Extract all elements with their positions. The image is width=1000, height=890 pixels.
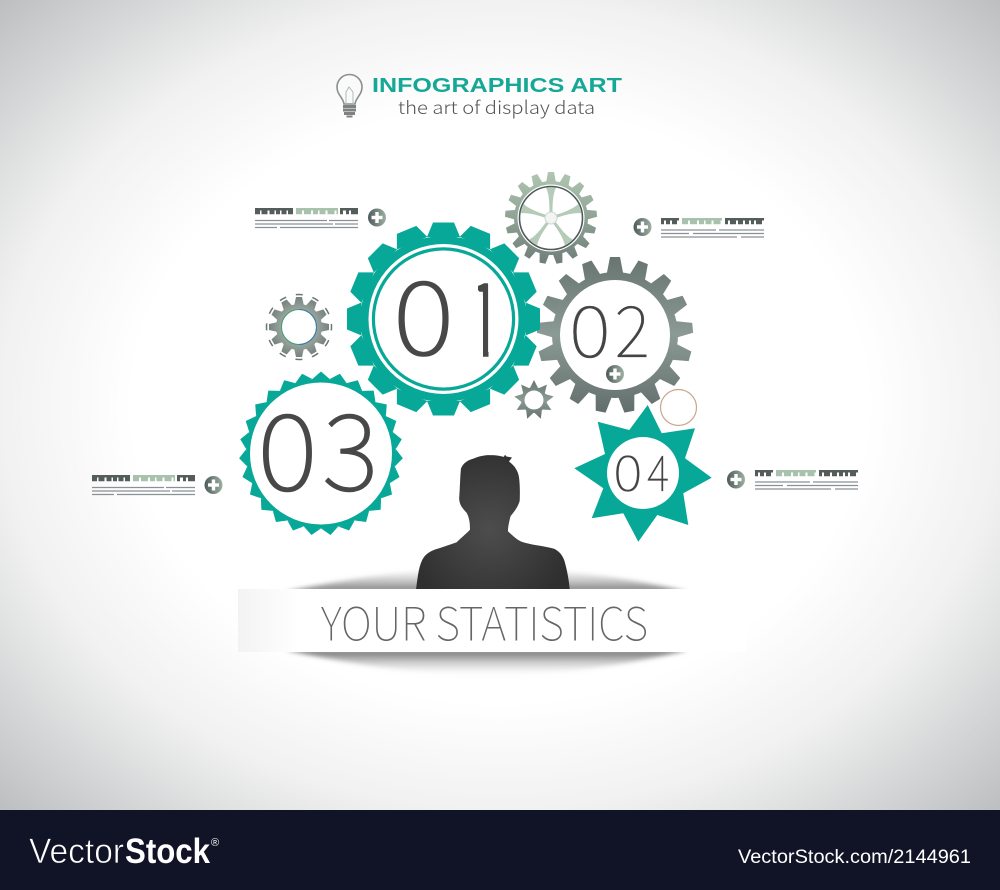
banner shadows bbox=[285, 568, 688, 675]
number 03: 3 bbox=[322, 368, 378, 521]
number 03: 0 bbox=[257, 368, 318, 520]
icon: plus bbox=[606, 365, 624, 383]
footer logo: ® bbox=[211, 837, 219, 849]
icon: light bulb bbox=[337, 74, 362, 116]
gear 02 bbox=[536, 257, 694, 413]
number 01 bbox=[398, 280, 488, 357]
footer bar bbox=[0, 810, 1000, 890]
callout: top right text strip bbox=[634, 218, 764, 237]
subtitle: the art of display data bbox=[398, 94, 595, 120]
person silhouette bbox=[416, 455, 570, 589]
star badge 04 bbox=[574, 405, 712, 542]
banner: your statistics bbox=[238, 588, 747, 654]
title: INFOGRAPHICS ART bbox=[372, 75, 622, 97]
ring outline bbox=[660, 390, 696, 426]
callout: top left text strip bbox=[255, 208, 386, 228]
gear: top spoked wheel bbox=[504, 172, 597, 264]
number 04: 4 bbox=[647, 435, 669, 506]
footer logo: Vector bbox=[29, 832, 124, 871]
gear: small star cog bbox=[514, 380, 554, 419]
gear: small left bbox=[265, 293, 333, 361]
number 02: 2 bbox=[615, 275, 650, 378]
banner text: YOUR STATISTICS bbox=[321, 588, 648, 654]
footer logo bbox=[29, 832, 219, 871]
callout: left text strip bbox=[92, 475, 222, 494]
number 03 bbox=[257, 368, 378, 521]
number 01: 1 bbox=[457, 239, 510, 386]
number 01: 0 bbox=[393, 237, 454, 384]
number 02: 0 bbox=[569, 275, 611, 378]
gear 01 bbox=[347, 222, 540, 416]
number 04 bbox=[613, 434, 669, 506]
header: logo and title bbox=[337, 74, 622, 120]
number 04: 0 bbox=[613, 434, 642, 506]
gear 03 bbox=[239, 368, 403, 536]
footer image id: VectorStock.com/2144961 bbox=[738, 847, 971, 868]
number 02 bbox=[569, 275, 650, 378]
footer logo: Stock bbox=[125, 832, 210, 871]
callout: right text strip bbox=[727, 470, 858, 489]
